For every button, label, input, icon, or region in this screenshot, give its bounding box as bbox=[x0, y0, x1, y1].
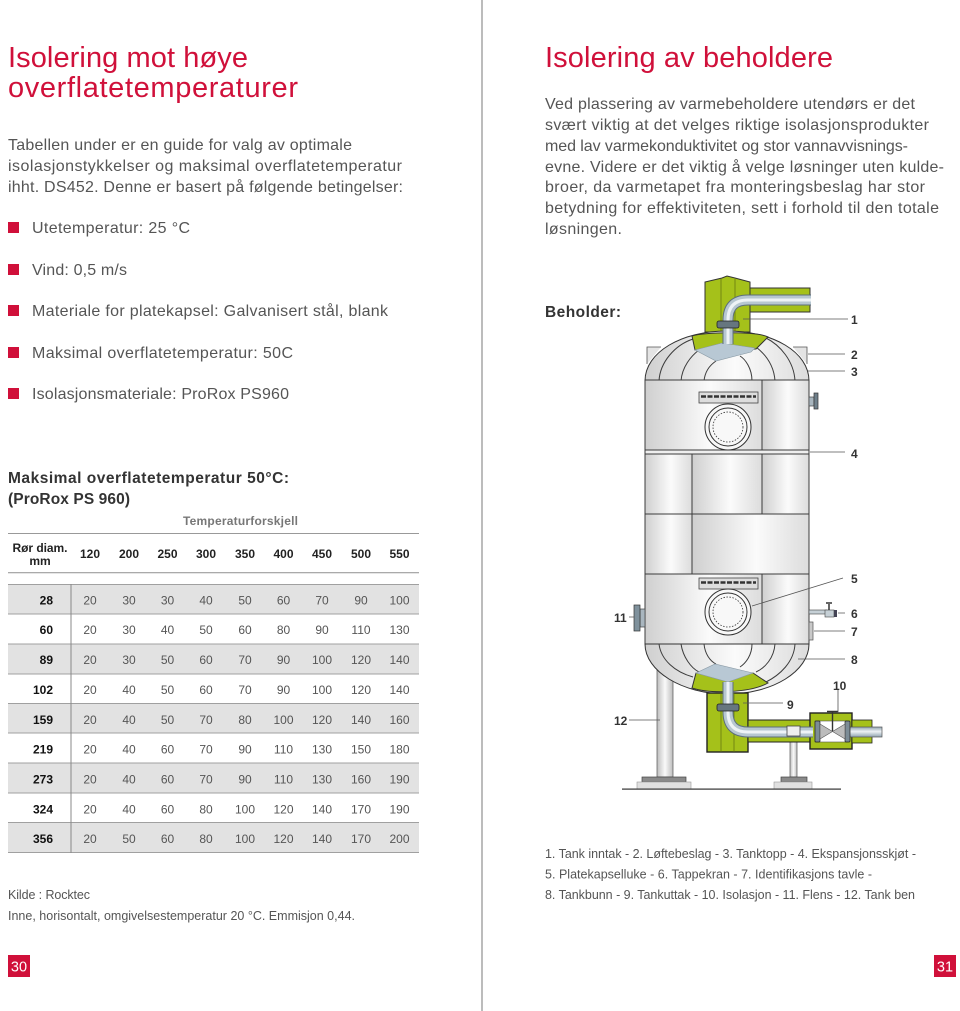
row 219: 110 bbox=[274, 742, 293, 756]
paragraph about tanks: betydning for effektiviteten, sett i forhold til den totale bbox=[545, 200, 939, 217]
row 60: 90 bbox=[315, 623, 329, 637]
row 356: 170 bbox=[351, 832, 371, 846]
row 273: 40 bbox=[122, 772, 136, 786]
row 102: 102 bbox=[33, 683, 53, 697]
row 324: 20 bbox=[83, 802, 97, 816]
tank bottom dome bbox=[645, 644, 809, 694]
row 356: 60 bbox=[161, 832, 174, 846]
table header bbox=[8, 514, 419, 573]
row 273: 110 bbox=[274, 772, 293, 786]
paragraph about tanks bbox=[545, 96, 944, 238]
row 89: 90 bbox=[277, 653, 290, 667]
row 60: 50 bbox=[199, 623, 213, 637]
table header: 550 bbox=[389, 547, 410, 561]
row 159 bbox=[33, 713, 410, 727]
row 324: 170 bbox=[351, 802, 371, 816]
row 159: 120 bbox=[312, 713, 332, 727]
row 89: 89 bbox=[40, 653, 53, 667]
diagram: insulated tank bbox=[614, 276, 882, 790]
row 102: 70 bbox=[238, 683, 252, 697]
row 28: 30 bbox=[122, 594, 136, 608]
row 102: 50 bbox=[161, 683, 174, 697]
source note: Kilde : Rocktec bbox=[8, 888, 90, 902]
row 273: 130 bbox=[312, 772, 332, 786]
intro text block: isolasjonstykkelser og maksimal overflatetemperatur bbox=[8, 158, 403, 175]
row 60: 20 bbox=[83, 623, 97, 637]
bottom outlet insulation bbox=[692, 664, 872, 752]
row 60: 80 bbox=[277, 623, 290, 637]
row 324: 190 bbox=[389, 802, 410, 816]
row 219: 70 bbox=[199, 742, 213, 756]
bullet list of conditions: Isolasjonsmateriale: ProRox PS960 bbox=[32, 386, 289, 403]
drain valve bbox=[809, 603, 837, 617]
row 356: 80 bbox=[199, 832, 213, 846]
parts legend: 5. Platekapselluke - 6. Tappekran - 7. Identifikasjons tavle - bbox=[545, 868, 872, 882]
lower nameplate bbox=[699, 578, 758, 589]
callout numbers bbox=[614, 313, 858, 728]
callout numbers: 8 bbox=[851, 653, 858, 667]
row 102: 90 bbox=[277, 683, 290, 697]
row 219: 60 bbox=[161, 742, 174, 756]
callout numbers: 11 bbox=[614, 611, 627, 625]
callout numbers: 10 bbox=[833, 679, 847, 693]
row 356: 200 bbox=[389, 832, 410, 846]
row 273: 60 bbox=[161, 772, 174, 786]
intro text block: Tabellen under er en guide for valg av optimale bbox=[8, 137, 352, 154]
row 159: 40 bbox=[122, 713, 136, 727]
table header: 400 bbox=[273, 547, 294, 561]
row 89: 120 bbox=[351, 653, 371, 667]
row 219: 90 bbox=[238, 742, 252, 756]
table header: 120 bbox=[80, 547, 100, 561]
outlet pipe bbox=[717, 682, 882, 737]
row 28: 20 bbox=[83, 594, 97, 608]
row 102: 60 bbox=[199, 683, 213, 697]
row 324: 140 bbox=[312, 802, 332, 816]
row 102: 100 bbox=[312, 683, 332, 697]
row 159: 160 bbox=[389, 713, 410, 727]
label: Beholder: Beholder: bbox=[545, 304, 621, 321]
page number 31: 31 bbox=[937, 960, 953, 976]
table header: Rør diam. bbox=[12, 541, 68, 555]
table header: 200 bbox=[119, 547, 139, 561]
row 102: 140 bbox=[389, 683, 410, 697]
parts legend: 1. Tank inntak - 2. Løftebeslag - 3. Tanktopp - 4. Ekspansjonsskjøt - bbox=[545, 847, 916, 861]
paragraph about tanks: med lav varmekonduktivitet og stor vannavvisnings- bbox=[545, 138, 908, 155]
identification plate bbox=[809, 622, 813, 640]
parts legend: 8. Tankbunn - 9. Tankuttak - 10. Isolasjon - 11. Flens - 12. Tank ben bbox=[545, 888, 915, 902]
row 324: 324 bbox=[33, 802, 53, 816]
bullet list of conditions: Utetemperatur: 25 °C bbox=[32, 220, 190, 237]
legs and supports bbox=[622, 670, 841, 790]
tank cylinder panels bbox=[645, 380, 809, 644]
row 324: 100 bbox=[235, 802, 255, 816]
row 324: 80 bbox=[199, 802, 213, 816]
row 60: 60 bbox=[40, 623, 53, 637]
row 159: 159 bbox=[33, 713, 53, 727]
row 159: 140 bbox=[351, 713, 371, 727]
intro text block bbox=[8, 137, 403, 196]
table: maximum surface temperature bbox=[8, 514, 419, 853]
row 60 bbox=[40, 623, 410, 637]
row 28: 100 bbox=[389, 594, 410, 608]
right side flange bbox=[809, 393, 818, 409]
row 102: 120 bbox=[351, 683, 371, 697]
paragraph about tanks: Ved plassering av varmebeholdere utendørs er det bbox=[545, 96, 916, 113]
lower hatch bbox=[705, 589, 751, 635]
callout numbers: 3 bbox=[851, 365, 858, 379]
row 102: 20 bbox=[83, 683, 97, 697]
row 28: 28 bbox=[40, 594, 53, 608]
row 159: 20 bbox=[83, 713, 97, 727]
valve bbox=[815, 712, 850, 742]
row 28 bbox=[40, 594, 410, 608]
row 89 bbox=[40, 653, 410, 667]
row 159: 70 bbox=[199, 713, 213, 727]
table header: mm bbox=[29, 554, 51, 568]
row 324: 40 bbox=[122, 802, 136, 816]
row 219: 40 bbox=[122, 742, 136, 756]
row 28: 40 bbox=[199, 594, 213, 608]
leader lines bbox=[629, 319, 848, 720]
row 273: 70 bbox=[199, 772, 213, 786]
source note bbox=[8, 888, 355, 923]
row 28: 60 bbox=[277, 594, 290, 608]
paragraph about tanks: evne. Videre er det viktig å velge løsninger uten kulde- bbox=[545, 158, 944, 176]
callout numbers: 2 bbox=[851, 348, 858, 362]
callout numbers: 7 bbox=[851, 625, 858, 639]
row 324: 120 bbox=[273, 802, 294, 816]
table header: 250 bbox=[157, 547, 178, 561]
heading: Isolering mot høye overflatetemperaturer: Isolering mot høye bbox=[8, 42, 248, 74]
row 273: 190 bbox=[389, 772, 410, 786]
page number 31 bbox=[934, 955, 956, 977]
tank inlet insulation bbox=[705, 276, 810, 332]
table header: 450 bbox=[312, 547, 332, 561]
row 89: 30 bbox=[122, 653, 136, 667]
callout numbers: 9 bbox=[787, 698, 794, 712]
row 89: 70 bbox=[238, 653, 252, 667]
paragraph about tanks: svært viktig at det velges riktige isolasjonsprodukter bbox=[545, 117, 930, 134]
source note: Inne, horisontalt, omgivelsestemperatur 20 °C. Emmisjon 0,44. bbox=[8, 909, 355, 923]
row 89: 50 bbox=[161, 653, 174, 667]
table header: Temperaturforskjell bbox=[183, 514, 298, 528]
row 273: 160 bbox=[351, 772, 371, 786]
tank inlet pipe and flange bbox=[717, 300, 811, 344]
row 28: 90 bbox=[354, 594, 368, 608]
callout numbers: 6 bbox=[851, 607, 858, 621]
table row backgrounds bbox=[8, 584, 419, 853]
row 28: 30 bbox=[161, 594, 174, 608]
table heading: Maksimal overflatetemperatur 50°C: bbox=[8, 470, 289, 487]
row 273: 273 bbox=[33, 772, 53, 786]
row 219: 150 bbox=[351, 742, 371, 756]
row 60: 110 bbox=[351, 623, 371, 637]
row 60: 30 bbox=[122, 623, 136, 637]
row 102 bbox=[33, 683, 410, 697]
heading: Isolering mot høye overflatetemperaturer bbox=[8, 42, 298, 104]
row 219 bbox=[33, 742, 410, 756]
callout numbers: 4 bbox=[851, 447, 858, 461]
table heading: (ProRox PS 960) bbox=[8, 491, 130, 508]
top hatch bbox=[705, 404, 751, 450]
table heading bbox=[8, 470, 289, 508]
table header: 350 bbox=[235, 547, 255, 561]
intro text block: ihht. DS452. Denne er basert på følgende betingelser: bbox=[8, 178, 403, 196]
row 356: 50 bbox=[122, 832, 136, 846]
row 273: 20 bbox=[83, 772, 97, 786]
parts legend bbox=[545, 847, 916, 902]
row 219: 130 bbox=[312, 742, 332, 756]
paragraph about tanks: løsningen. bbox=[545, 221, 622, 238]
row 324: 60 bbox=[161, 802, 174, 816]
row 219: 219 bbox=[33, 742, 53, 756]
page number 30 bbox=[8, 955, 30, 977]
row 28: 70 bbox=[315, 594, 329, 608]
row 273: 90 bbox=[238, 772, 252, 786]
callout numbers: 1 bbox=[851, 313, 858, 327]
bullet list of conditions: Maksimal overflatetemperatur: 50C bbox=[32, 345, 293, 362]
row 356 bbox=[33, 832, 410, 846]
flange left bbox=[634, 605, 645, 631]
row 273 bbox=[33, 772, 410, 786]
callout numbers: 12 bbox=[614, 714, 628, 728]
row 159: 100 bbox=[273, 713, 294, 727]
row 102: 40 bbox=[122, 683, 136, 697]
heading: Isolering av beholdere: Isolering av beholdere bbox=[545, 42, 833, 74]
top nameplate bbox=[699, 392, 758, 403]
table header: 300 bbox=[196, 547, 216, 561]
row 219: 180 bbox=[389, 742, 410, 756]
row 89: 20 bbox=[83, 653, 97, 667]
row 60: 40 bbox=[161, 623, 174, 637]
bullet list of conditions: Materiale for platekapsel: Galvanisert stål, blank bbox=[32, 302, 389, 320]
paragraph about tanks: broer, da varmetapet fra monteringsbeslag har stor bbox=[545, 179, 926, 196]
row 89: 100 bbox=[312, 653, 332, 667]
bullet list of conditions bbox=[8, 220, 389, 403]
row 89: 140 bbox=[389, 653, 410, 667]
page number 30: 30 bbox=[11, 960, 27, 976]
row 356: 356 bbox=[33, 832, 53, 846]
row 159: 50 bbox=[161, 713, 174, 727]
row 356: 100 bbox=[235, 832, 255, 846]
table header: 500 bbox=[351, 547, 371, 561]
bullet list of conditions: Vind: 0,5 m/s bbox=[32, 262, 127, 279]
row 356: 120 bbox=[273, 832, 294, 846]
row 60: 130 bbox=[389, 623, 410, 637]
heading: Isolering mot høye overflatetemperaturer: overflatetemperaturer bbox=[8, 72, 298, 104]
row 219: 20 bbox=[83, 742, 97, 756]
callout numbers: 5 bbox=[851, 572, 858, 586]
row 28: 50 bbox=[238, 594, 252, 608]
row 60: 60 bbox=[238, 623, 252, 637]
row 159: 80 bbox=[238, 713, 252, 727]
row 356: 20 bbox=[83, 832, 97, 846]
tank top dome bbox=[645, 331, 809, 381]
row 356: 140 bbox=[312, 832, 332, 846]
row 324 bbox=[33, 802, 410, 816]
row 89: 60 bbox=[199, 653, 213, 667]
page divider bbox=[481, 0, 483, 1011]
